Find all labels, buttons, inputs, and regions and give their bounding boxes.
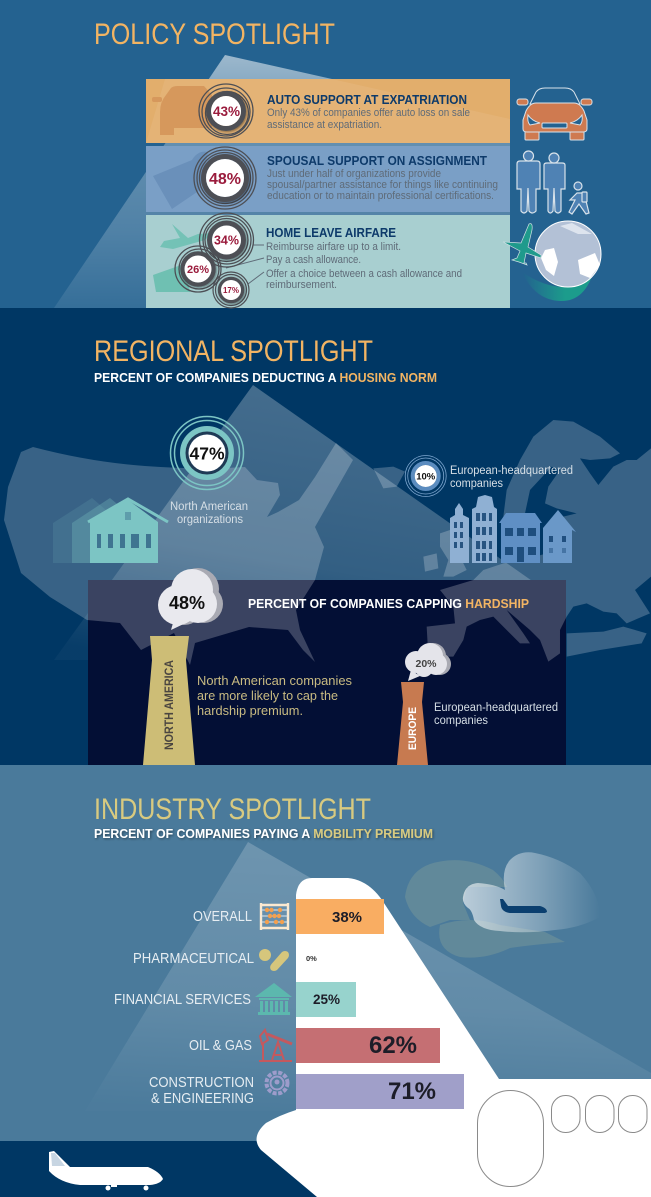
subtitle: mobility premium: PERCENT OF COMPANIES PAYING A MOBILITY PREMIUM xyxy=(94,826,433,841)
heading: SPOUSAL SUPPORT ON ASSIGNMENT xyxy=(267,153,487,168)
body line 2: spousal/partner assistance for things like continuing xyxy=(267,179,498,191)
roof xyxy=(88,499,168,522)
label: european-headquartered: European-headquartered xyxy=(450,465,573,477)
townhouse three xyxy=(499,513,542,563)
iceland xyxy=(373,467,405,488)
great britain xyxy=(440,530,467,577)
text: europe note xyxy=(434,702,558,727)
cloud shadow xyxy=(164,568,223,625)
townhouse four xyxy=(543,510,576,563)
globe xyxy=(535,221,601,287)
ghost icon: plane xyxy=(160,224,212,249)
adult one xyxy=(517,161,540,213)
label: pharmaceutical: PHARMACEUTICAL xyxy=(133,951,254,967)
plane xyxy=(503,224,541,265)
title: regional spotlight: REGIONAL SPOTLIGHT xyxy=(94,335,373,368)
option 1: Reimburse airfare up to a limit. xyxy=(266,241,401,253)
heading: capping hardship: PERCENT OF COMPANIES CAPPING HARDSHIP xyxy=(248,596,529,611)
ghost icon: car xyxy=(152,86,212,135)
ghost icon: open book xyxy=(153,152,208,209)
airplane tail and fuselage xyxy=(257,878,651,1197)
wheels xyxy=(525,128,539,140)
ring: 10% xyxy=(405,456,446,496)
ring: 26% xyxy=(175,246,221,292)
label: overall: OVERALL xyxy=(193,909,252,925)
ring: 17%: 17% xyxy=(223,286,239,295)
ghost house far xyxy=(53,498,121,563)
beam overlay on auto panel xyxy=(332,79,510,119)
child head xyxy=(574,182,582,190)
body xyxy=(523,103,587,132)
text: north america note: hardship premium. xyxy=(197,703,303,718)
icon: car xyxy=(517,88,592,140)
icon: european townhouses xyxy=(450,495,576,563)
body line 2: assistance at expatriation. xyxy=(267,119,382,131)
backpack xyxy=(582,192,587,202)
cloud front xyxy=(463,852,600,932)
label: construction and engineering xyxy=(149,1075,254,1107)
bar: financial services: 25% xyxy=(313,992,340,1007)
icon: small plane in cloud xyxy=(500,899,547,913)
label: construction and engineering: CONSTRUCTION xyxy=(149,1075,254,1091)
cloud: 20% xyxy=(405,643,451,681)
bar: pharmaceutical: 0% xyxy=(306,954,317,963)
bar: oil and gas xyxy=(296,1028,440,1063)
label: north american organizations xyxy=(170,501,248,526)
ring: 26%: 26% xyxy=(187,264,209,276)
heading: AUTO SUPPORT AT EXPATRIATION xyxy=(267,92,467,107)
windows xyxy=(97,512,151,548)
label: north american organizations: organizations xyxy=(177,514,243,526)
bar: construction and engineering xyxy=(296,1074,464,1109)
door xyxy=(478,1090,544,1186)
icon: north american houses xyxy=(53,498,168,563)
icon: bank xyxy=(255,983,292,1015)
window three xyxy=(618,1096,647,1132)
bar: construction and engineering: 71% xyxy=(388,1078,436,1105)
title: policy spotlight: POLICY SPOTLIGHT xyxy=(94,18,335,51)
option 2: Pay a cash allowance. xyxy=(266,254,361,266)
roof xyxy=(530,88,580,104)
leader lines xyxy=(226,245,264,284)
panel: hardship xyxy=(88,580,566,765)
value: 20% xyxy=(415,658,437,670)
dark ground band xyxy=(0,1141,330,1197)
panel: spousal support xyxy=(146,146,510,212)
text: north america note: are more likely to cap the xyxy=(197,688,338,703)
label: financial services: FINANCIAL SERVICES xyxy=(114,992,251,1008)
label: north american organizations: North American xyxy=(170,501,248,513)
continent xyxy=(427,420,651,662)
text: home leave airfare xyxy=(266,225,462,291)
text: north america note: North American companies xyxy=(197,673,352,688)
panel: home leave airfare xyxy=(146,215,510,308)
text: europe note: European-headquartered xyxy=(434,702,558,714)
townhouse two xyxy=(472,495,497,563)
ring: 34% xyxy=(200,213,254,267)
townhouse one xyxy=(450,503,469,563)
child xyxy=(569,193,589,214)
text: spousal support xyxy=(267,153,498,202)
northern patches xyxy=(560,223,592,234)
label: construction and engineering: & ENGINEERING xyxy=(151,1091,254,1107)
heading: HOME LEAVE AIRFARE xyxy=(266,225,396,240)
text: north america note xyxy=(197,673,352,718)
adult two head xyxy=(549,153,559,163)
window two xyxy=(586,1096,614,1132)
ghost house mid xyxy=(72,498,140,563)
cloud back xyxy=(405,860,565,958)
ring: 47%: 47% xyxy=(189,444,225,464)
section background: regional xyxy=(0,308,651,765)
adult one head xyxy=(524,151,534,161)
title: industry spotlight: INDUSTRY SPOTLIGHT xyxy=(94,793,371,826)
icon: globe and plane xyxy=(503,221,601,301)
text: auto support xyxy=(267,92,470,131)
label: oil and gas: OIL & GAS xyxy=(189,1038,252,1054)
chimney: north america: NORTH AMERICA xyxy=(164,660,176,750)
bar: financial services xyxy=(296,982,356,1017)
ring: 47% xyxy=(170,416,244,490)
ring: 10%: 10% xyxy=(416,472,436,482)
adult two xyxy=(544,163,565,213)
ring: 48% xyxy=(194,147,256,209)
ring: 48%: 48% xyxy=(209,171,241,188)
mirrors xyxy=(517,99,528,105)
turkey xyxy=(567,627,647,657)
body line 3: education or to maintain professional certifications. xyxy=(267,190,494,202)
headlights and grille xyxy=(528,115,582,125)
cloud body xyxy=(405,643,447,681)
continents xyxy=(541,248,600,278)
chimney: north america xyxy=(143,636,195,765)
icon: oil pump xyxy=(259,1030,292,1061)
bar: oil and gas: 62% xyxy=(369,1032,417,1059)
section background: policy xyxy=(0,0,651,308)
label: european-headquartered xyxy=(450,465,573,490)
swoosh xyxy=(522,270,594,301)
windows xyxy=(454,513,566,562)
beam: industry spotlight xyxy=(85,842,651,1111)
ireland xyxy=(423,553,438,572)
ring: 43% xyxy=(199,84,253,138)
beam wedge on auto panel xyxy=(146,79,510,143)
icon: gear xyxy=(266,1072,288,1094)
icon: abacus xyxy=(261,903,288,930)
ring: 43%: 43% xyxy=(213,104,240,119)
map: north america xyxy=(4,443,353,665)
option 3 line 2: reimbursement. xyxy=(266,279,337,291)
value: 48% xyxy=(169,593,205,613)
bar: overall xyxy=(296,899,384,934)
cloud: 48% xyxy=(158,568,223,630)
bar: overall: 38% xyxy=(332,909,362,926)
body line 1: Just under half of organizations provide xyxy=(267,168,441,180)
text: europe note: companies xyxy=(434,715,488,727)
icon: pills xyxy=(259,949,289,971)
cloud shadow xyxy=(420,643,451,675)
panel: auto support xyxy=(146,79,510,143)
subtitle: housing norm: PERCENT OF COMPANIES DEDUCTING A HOUSING NORM xyxy=(94,370,437,385)
ring: 17% xyxy=(213,272,249,308)
chimney: europe: EUROPE xyxy=(407,707,419,750)
body line 1: Only 43% of companies offer auto loss on sale xyxy=(267,107,470,119)
label: european-headquartered: companies xyxy=(450,478,503,490)
map: europe xyxy=(373,420,651,662)
window one xyxy=(552,1096,580,1132)
section background: industry xyxy=(0,765,651,1197)
ring: 34%: 34% xyxy=(214,234,239,248)
icon: plane on ground xyxy=(49,1151,163,1190)
option 3 line 1: Offer a choice between a cash allowance and xyxy=(266,268,462,280)
beam: regional spotlight xyxy=(54,385,545,660)
main house xyxy=(90,500,158,563)
chimney: europe xyxy=(397,682,428,765)
ghost icon: wallet xyxy=(153,264,190,292)
icon: family xyxy=(517,151,589,214)
cloud body xyxy=(158,569,217,630)
beam: policy spotlight xyxy=(54,55,510,308)
